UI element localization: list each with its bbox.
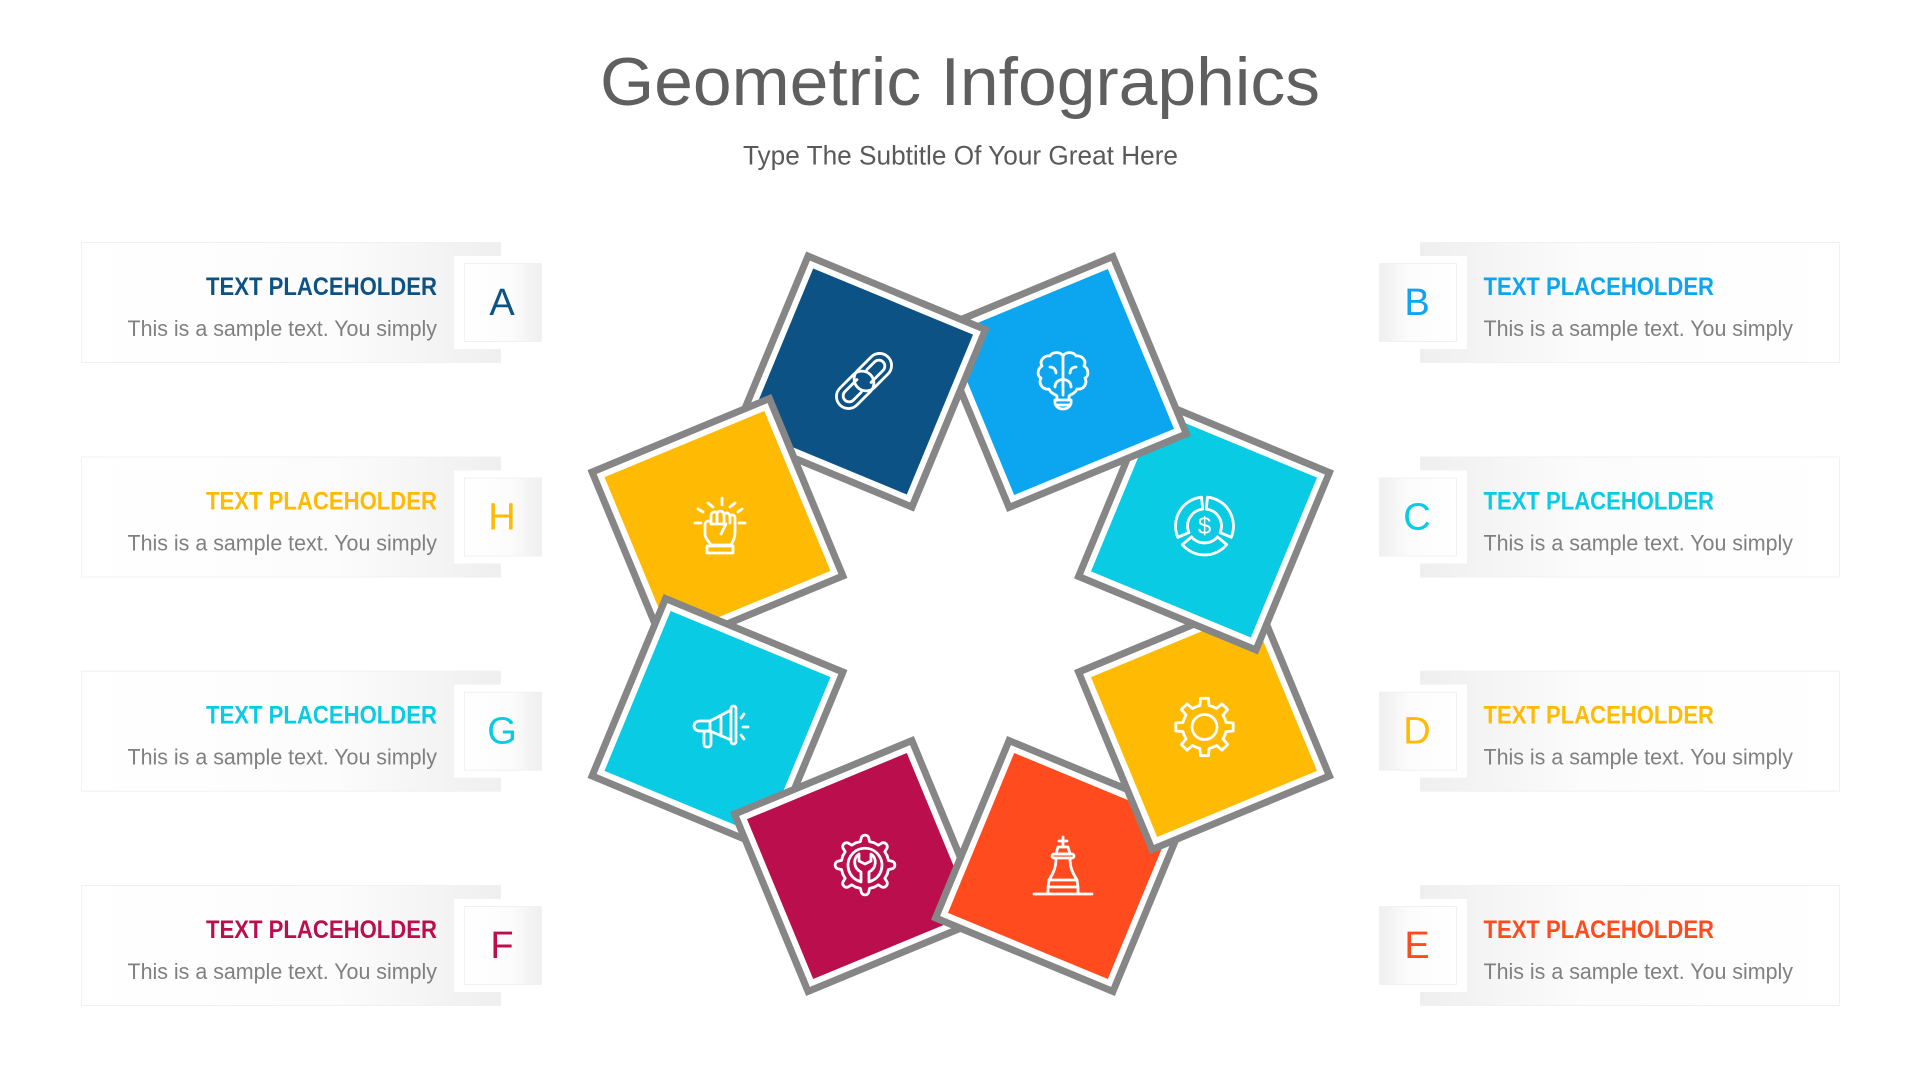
panel D: TEXT PLACEHOLDER [1484, 702, 1714, 730]
panel B: B [1404, 282, 1430, 324]
panel G [82, 671, 542, 791]
square G: cyan [592, 599, 843, 849]
panel D: D [1403, 711, 1431, 753]
icon: dollar segmented circle: $ [1198, 513, 1211, 540]
panel A [82, 242, 542, 362]
title: Geometric Infographics [600, 44, 1320, 120]
square B: sky blue [936, 257, 1186, 507]
icon: gear with wrench [835, 835, 895, 895]
panel B [1380, 242, 1840, 362]
square F: crimson [735, 741, 985, 991]
panel H [82, 457, 542, 577]
icon: dollar segmented circle [1176, 497, 1233, 555]
panel G: G [487, 711, 517, 753]
panel F: TEXT PLACEHOLDER [206, 916, 437, 944]
panel D [1380, 671, 1840, 791]
panel C [1380, 457, 1840, 577]
icon: gear [1176, 698, 1233, 756]
panel E [1380, 886, 1840, 1006]
panel F: F [490, 925, 514, 967]
panel E: E [1404, 925, 1430, 967]
icon: megaphone [694, 706, 748, 747]
panel C: This is a sample text. You simply [1484, 530, 1793, 556]
square C: cyan [1079, 399, 1329, 650]
panel B: TEXT PLACEHOLDER [1484, 273, 1714, 301]
panel H: This is a sample text. You simply [128, 530, 437, 556]
panel C: C [1403, 496, 1431, 538]
panel C: TEXT PLACEHOLDER [1484, 488, 1714, 516]
panel D: This is a sample text. You simply [1484, 745, 1793, 770]
square H: yellow [592, 399, 843, 649]
panel H: H [488, 496, 516, 538]
panel B: This is a sample text. You simply [1484, 316, 1793, 341]
square E: orange [936, 741, 1186, 991]
panel F: This is a sample text. You simply [128, 959, 437, 984]
panel G: TEXT PLACEHOLDER [206, 702, 437, 730]
icon: raised fist [695, 498, 745, 553]
icon: chess king [1034, 837, 1092, 894]
panel F [82, 886, 542, 1006]
panel A: A [489, 282, 515, 324]
subtitle: Type The Subtitle Of Your Great Here [743, 140, 1178, 170]
panel A: This is a sample text. You simply [128, 316, 437, 341]
panel G: This is a sample text. You simply [128, 745, 437, 770]
square A overlap over B [900, 300, 990, 512]
panel A: TEXT PLACEHOLDER [206, 273, 437, 301]
panel E: This is a sample text. You simply [1484, 959, 1793, 984]
panel E: TEXT PLACEHOLDER [1484, 916, 1714, 944]
icon: brain bulb [1038, 353, 1088, 409]
square D: yellow [1079, 599, 1329, 849]
icon: chain link [831, 348, 897, 414]
square A: dark blue [735, 256, 985, 507]
panel H: TEXT PLACEHOLDER [206, 488, 437, 516]
